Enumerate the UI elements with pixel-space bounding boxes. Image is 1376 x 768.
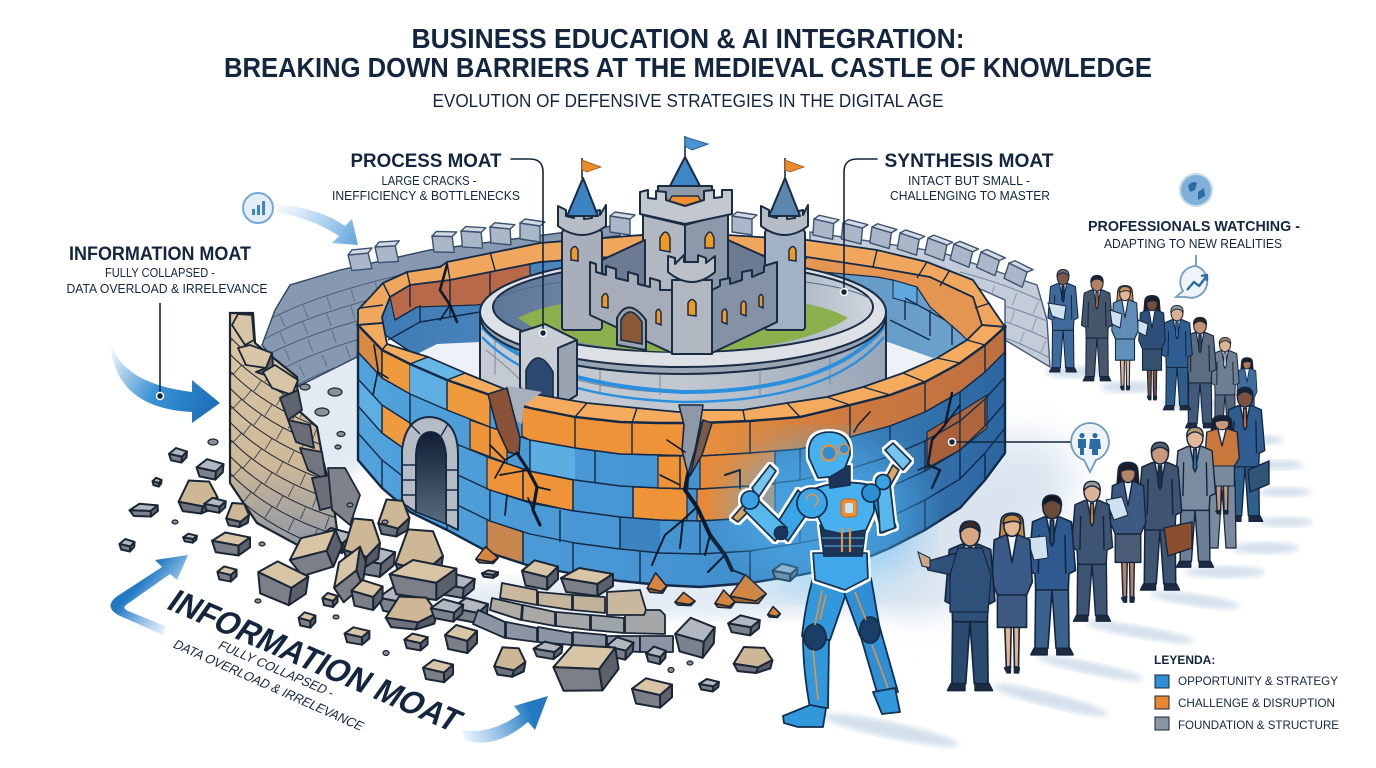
lawn xyxy=(518,295,848,352)
person 4 grey haired man xyxy=(1071,481,1113,621)
callout: information moat line xyxy=(156,303,164,400)
mortar lines xyxy=(358,352,1005,456)
central keep xyxy=(640,136,732,300)
tool: hammer xyxy=(878,465,899,497)
icon: globe badge xyxy=(1180,174,1212,206)
person 2 woman xyxy=(992,513,1032,673)
rubble: fallen wall section xyxy=(473,583,673,652)
title: BREAKING DOWN BARRIERS AT THE MEDIEVAL CASTLE OF KNOWLEDGE xyxy=(224,52,1152,83)
broken top blocks xyxy=(232,314,360,525)
cracks xyxy=(373,265,960,575)
label: information moat: INFORMATION MOAT xyxy=(69,244,251,265)
inner wall gate xyxy=(520,324,577,407)
front curtain wall right xyxy=(712,262,777,353)
robot waist and pelvis xyxy=(813,553,868,590)
callout: process moat line xyxy=(511,159,543,333)
label: process moat: PROCESS MOAT xyxy=(350,151,502,172)
person 7 blond man xyxy=(1174,427,1216,567)
callout: synthesis moat line xyxy=(844,159,877,292)
rim gaps with torn edges xyxy=(488,386,712,476)
robot glow xyxy=(730,440,920,590)
person 6 bearded man xyxy=(1138,442,1192,590)
callout: wall crack to people xyxy=(948,438,1072,446)
label: information moat: DATA OVERLOAD & IRRELEVANCE xyxy=(66,281,268,296)
robot upper body xyxy=(732,432,911,590)
tool: chisel xyxy=(752,465,776,498)
label: professionals watching xyxy=(1088,218,1300,251)
robot figure xyxy=(730,432,920,727)
label: information moat: FULLY COLLAPSED - xyxy=(105,265,215,280)
person 1 man gesturing xyxy=(918,521,995,691)
icon: people speech bubble xyxy=(1071,423,1109,472)
robot arms xyxy=(774,490,813,541)
robot head xyxy=(809,432,850,478)
people: back row xyxy=(1048,269,1257,436)
wall front rim xyxy=(358,323,1005,423)
title xyxy=(224,23,1152,83)
far wall battlements xyxy=(347,212,1034,289)
label: professionals watching: PROFESSIONALS WATCHING - xyxy=(1088,218,1300,235)
right tower xyxy=(761,158,808,330)
legend xyxy=(1154,653,1339,732)
person 8 orange jacket xyxy=(1205,416,1239,548)
front curtain wall left with door xyxy=(590,262,672,353)
person 3 with paper xyxy=(1027,495,1075,655)
icon: bar chart badge xyxy=(243,193,273,223)
robot neck xyxy=(828,466,850,488)
label: process moat: LARGE CRACKS - xyxy=(382,173,476,188)
people: front row xyxy=(918,387,1269,691)
rubble piles xyxy=(119,384,798,708)
ground shadows xyxy=(285,340,1313,752)
slanted label: information moat on ground: INFORMATION MOAT xyxy=(160,584,470,739)
subtitle: EVOLUTION OF DEFENSIVE STRATEGIES IN THE DIGITAL AGE xyxy=(432,91,944,111)
robot shoulders xyxy=(797,488,827,518)
slanted label: information moat on ground: FULLY COLLAPSED - xyxy=(215,638,338,700)
label: synthesis moat xyxy=(884,151,1054,203)
inner grey wall: synthesis moat xyxy=(480,257,886,440)
title: BUSINESS EDUCATION & AI INTEGRATION: xyxy=(412,23,964,54)
brick wall inner back face and floor xyxy=(358,232,1005,395)
robot torso xyxy=(816,482,874,534)
label: professionals watching: ADAPTING TO NEW REALITIES xyxy=(1104,236,1282,251)
arrow: lower left xyxy=(110,555,188,635)
person 9 with briefcase xyxy=(1225,387,1269,521)
legend: LEYENDA: xyxy=(1154,653,1215,667)
panel: collapsed beige wall xyxy=(228,313,360,553)
back curtain walls xyxy=(602,240,645,300)
person 5 woman with papers xyxy=(1106,462,1146,602)
icon: trend speech bubble xyxy=(1176,266,1207,298)
label: synthesis moat: SYNTHESIS MOAT xyxy=(884,151,1054,172)
wall front face xyxy=(358,325,1005,587)
rubble: main pile xyxy=(254,500,488,630)
orange bricks xyxy=(358,325,1005,563)
legend item: foundation: FOUNDATION & STRUCTURE xyxy=(1178,718,1339,732)
far stone wall xyxy=(260,212,1050,393)
robot legs xyxy=(783,575,900,727)
front round tower xyxy=(668,255,715,354)
wall gate arch xyxy=(402,417,458,530)
label: information moat xyxy=(66,244,268,296)
label: synthesis moat: CHALLENGING TO MASTER xyxy=(890,188,1050,203)
callout dots xyxy=(540,288,848,336)
left tower xyxy=(558,158,606,330)
lighter blue bricks xyxy=(358,364,575,480)
arrow: information moat left xyxy=(110,338,220,423)
paper in back row xyxy=(1048,303,1148,336)
legend item: challenge: CHALLENGE & DISRUPTION xyxy=(1178,696,1335,710)
back rim of brick wall xyxy=(358,232,1005,327)
label: process moat xyxy=(332,151,520,203)
arrow: into information wall from top xyxy=(278,205,358,245)
arrow: lower right xyxy=(462,696,548,743)
legend item: opportunity: OPPORTUNITY & STRATEGY xyxy=(1178,674,1338,688)
label: synthesis moat: INTACT BUT SMALL - xyxy=(908,173,1030,188)
label: process moat: INEFFICIENCY & BOTTLENECKS xyxy=(332,188,520,203)
small debris xyxy=(172,384,693,672)
connector: professionals to trend icon xyxy=(1195,255,1197,266)
panel: outer brick wall xyxy=(358,265,1005,587)
castle xyxy=(558,136,808,354)
slanted label: information moat on ground: DATA OVERLOAD & IRRELEVANCE xyxy=(170,637,368,733)
